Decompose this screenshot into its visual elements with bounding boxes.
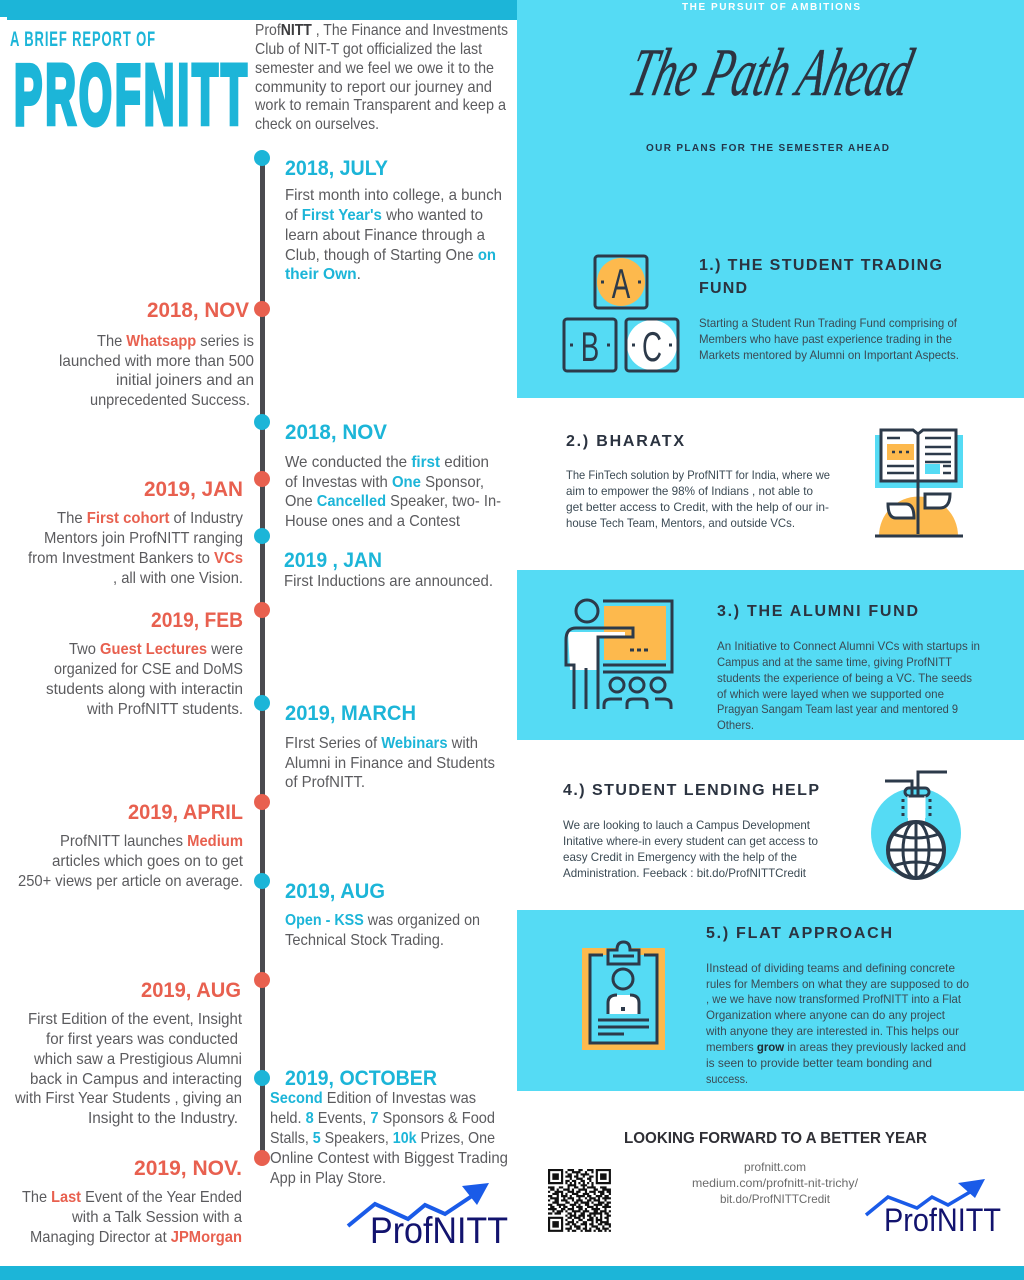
event: 2019 March: FIrst Series of Webinars with (285, 735, 478, 752)
event: 2019 April: 250+ views per article on average. (18, 873, 243, 890)
event: 2019 Aug Insight: back in Campus and interacting (30, 1071, 242, 1088)
event: 2019 Nov: The Last Event of the Year Ended (22, 1189, 242, 1206)
event: 2019 April: 2019, APRIL (128, 801, 243, 824)
intro paragraph: work to remain Transparent and keep a (254, 97, 506, 114)
event: 2019 Aug Insight: First Edition of the event, Insight (28, 1011, 243, 1028)
description (699, 316, 959, 362)
subtitle: OUR PLANS FOR THE SEMESTER AHEAD (646, 143, 889, 154)
event: 2018 Nov Investas: 2018, NOV (285, 421, 387, 444)
event: 2019 Aug Insight: Insight to the Industry. (88, 1110, 238, 1127)
description: house Tech Team, Mentors, and outside VCs. (566, 516, 795, 530)
icon: ABC blocks: B (581, 323, 599, 370)
event: 2019 Aug KSS (285, 880, 480, 949)
event: 2019 March: Alumni in Finance and Students (285, 755, 495, 772)
panel 3: alumni fund (517, 570, 1024, 740)
description: Markets mentored by Alumni on Important Aspects. (699, 348, 959, 362)
description: Administration. Feeback : bit.do/ProfNITTCredit (563, 866, 807, 880)
event: 2019 Jan inductions: First Inductions are announced. (284, 573, 493, 590)
eyebrow: pursuit of ambitions: THE PURSUIT OF AMBITIONS (682, 2, 860, 13)
description: Pragyan Sangam Team last year and mentored 9 (717, 702, 958, 716)
description: IInstead of dividing teams and defining concrete (706, 961, 955, 975)
footer links: profnitt.com (744, 1160, 806, 1174)
event: 2019 October (270, 1067, 508, 1187)
event: 2018 July: of First Year's who wanted to (285, 207, 483, 224)
event: 2019 Jan cohort: from Investment Bankers to VCs (28, 550, 243, 567)
intro paragraph: semester and we feel we owe it to the (255, 60, 494, 77)
description: easy Credit in Emergency with the help of the (563, 850, 797, 864)
description: Organization where anyone can do any project (706, 1008, 946, 1022)
footer heading: LOOKING FORWARD TO A BETTER YEAR (624, 1130, 927, 1147)
event: 2019 Aug KSS: Technical Stock Trading. (285, 932, 444, 949)
event: 2019 October: Online Contest with Biggest Trading (270, 1150, 508, 1167)
event: 2019 Aug Insight: which saw a Prestigious Alumni (33, 1051, 242, 1068)
icon: globe (871, 772, 961, 879)
panel 5: flat approach (517, 910, 1024, 1091)
heading (699, 257, 942, 297)
event: 2019 Jan inductions (284, 549, 493, 590)
event: 2018 Nov Whatsapp: launched with more than 500 (59, 353, 254, 370)
event: 2019 Jan cohort: The First cohort of Industry (57, 510, 243, 527)
heading: 2.) BHARATX (566, 433, 684, 450)
eyebrow: a brief report of: A BRIEF REPORT OF (10, 27, 155, 51)
description (563, 818, 818, 880)
logo: ProfNITT left: ProfNITT (370, 1210, 508, 1251)
logo: ProfNITT right: ProfNITT (884, 1202, 1001, 1238)
description: with anyone they are interested in. This helps our (705, 1024, 959, 1038)
description: , we we have now transformed ProfNITT into a Flat (706, 992, 962, 1006)
icon: clipboard (582, 942, 665, 1050)
panel 2: BharatX (566, 430, 963, 536)
logo: ProfNITT left (348, 1183, 508, 1251)
panel: header the path ahead (517, 0, 1024, 398)
event: 2019 October: Second Edition of Investas was (270, 1090, 476, 1107)
event: 2019 March (285, 702, 495, 791)
intro paragraph: check on ourselves. (255, 116, 379, 133)
event: 2019 Feb (46, 609, 243, 718)
event: 2018 Nov Investas: of Investas with One Sponsor, (285, 474, 484, 491)
heading: 3.) THE ALUMNI FUND (717, 603, 918, 620)
top bar (0, 0, 517, 20)
event: 2018 Nov Investas: We conducted the first edition (285, 454, 489, 471)
event: 2019 October: App in Play Store. (270, 1170, 386, 1187)
heading: 4.) STUDENT LENDING HELP (563, 782, 819, 799)
description (717, 639, 980, 732)
description (705, 961, 969, 1086)
title: PROFNITT: PROFNITT (14, 48, 247, 143)
event: 2019 Aug KSS: Open - KSS was organized on (285, 912, 480, 929)
event: 2019 October: Stalls, 5 Speakers, 10k Prizes, One (270, 1130, 495, 1147)
event: 2018 July (285, 157, 502, 283)
event: 2019 Nov: 2019, NOV. (134, 1157, 242, 1180)
header: report title (10, 27, 247, 143)
event: 2018 Nov Whatsapp (59, 299, 254, 409)
event: 2019 Jan cohort (28, 478, 243, 587)
footer links: medium.com/profnitt-nit-trichy/ (692, 1176, 859, 1190)
event: 2019 Aug Insight: with First Year Students , giving an (14, 1090, 242, 1107)
description: We are looking to lauch a Campus Development (563, 818, 811, 832)
event: 2019 April: ProfNITT launches Medium (60, 833, 243, 850)
intro paragraph (254, 22, 508, 133)
description: Others. (717, 718, 754, 732)
timeline spine with dots (254, 150, 270, 1166)
description: Starting a Student Run Trading Fund comprising of (699, 316, 958, 330)
event: 2019 Feb: Two Guest Lectures were (69, 641, 243, 658)
event: 2019 Nov (22, 1157, 242, 1246)
event: 2019 Feb: organized for CSE and DoMS (54, 661, 243, 678)
event: 2018 July: their Own. (285, 266, 361, 283)
panel 4: student lending help (563, 772, 961, 880)
event: 2019 Aug Insight: 2019, AUG (141, 979, 241, 1002)
icon: ABC blocks: C (642, 323, 662, 370)
event: 2018 Nov Whatsapp: The Whatsapp series is (97, 333, 254, 350)
icon: ABC blocks (564, 256, 678, 371)
event: 2019 Aug KSS: 2019, AUG (285, 880, 385, 903)
QR code (548, 1169, 611, 1232)
event: 2018 Nov Investas: One Cancelled Speaker, two- In- (285, 493, 501, 510)
description: of which were layed when we supported one (717, 687, 944, 701)
event: 2019 Jan cohort: 2019, JAN (144, 478, 243, 501)
description: members grow in areas they previously lacked and (706, 1040, 966, 1054)
event: 2018 July: Club, though of Starting One on (285, 247, 496, 264)
event: 2019 March: of ProfNITT. (285, 774, 365, 791)
intro paragraph: ProfNITT , The Finance and Investments (255, 22, 508, 39)
description: success. (706, 1072, 748, 1086)
event: 2018 Nov Investas (285, 421, 501, 530)
event: 2019 Aug Insight (14, 979, 243, 1127)
event: 2019 April: articles which goes on to get (52, 853, 244, 870)
event: 2018 July: First month into college, a bunch (285, 187, 502, 204)
event: 2019 Nov: with a Talk Session with a (71, 1209, 242, 1226)
event: 2018 Nov Whatsapp: 2018, NOV (147, 299, 249, 322)
event: 2019 Aug Insight: for first years was conducted (46, 1031, 238, 1048)
panel 1: student trading fund (564, 256, 959, 371)
intro paragraph: community to report our journey and (255, 79, 492, 96)
description: students the experience of being a VC. The seeds (717, 671, 972, 685)
intro paragraph: Club of NIT-T got officialized the last (255, 41, 482, 58)
footer links (692, 1160, 859, 1206)
description: Campus and at the same time, giving ProfNITT (717, 655, 953, 669)
event: 2019 October: 2019, OCTOBER (285, 1067, 437, 1090)
description: The FinTech solution by ProfNITT for India, where we (566, 468, 830, 482)
description: get better access to Credit, with the help of our in- (566, 500, 829, 514)
event: 2019 Jan cohort: Mentors join ProfNITT ranging (44, 530, 243, 547)
event: 2019 March: 2019, MARCH (285, 702, 416, 725)
description: is seen to provide better team bonding and (706, 1056, 932, 1070)
bottom bar (0, 1266, 1024, 1280)
description: An Initiative to Connect Alumni VCs with startups in (717, 639, 980, 653)
event: 2019 Jan inductions: 2019 , JAN (284, 549, 382, 572)
description: aim to empower the 98% of Indians , not able to (566, 484, 813, 498)
event: 2018 Nov Whatsapp: unprecedented Success. (90, 392, 250, 409)
event: 2018 Nov Whatsapp: initial joiners and an (116, 372, 254, 389)
logo: ProfNITT right (866, 1179, 1001, 1238)
heading: FUND (699, 280, 747, 297)
icon: presenter at board with audience (566, 600, 672, 709)
footer links: bit.do/ProfNITTCredit (720, 1192, 831, 1206)
description (566, 468, 830, 530)
heading: 5.) FLAT APPROACH (706, 925, 892, 942)
icon: ABC blocks: A (612, 260, 630, 307)
heading: 1.) THE STUDENT TRADING (699, 257, 942, 274)
event: 2019 Feb: students along with interactin (46, 681, 243, 698)
event: 2018 July: 2018, JULY (285, 157, 388, 180)
description: rules for Members on what they are supposed to do (706, 977, 969, 991)
event: 2019 Feb: 2019, FEB (151, 609, 243, 632)
event: 2019 October: held. 8 Events, 7 Sponsors & Food (270, 1110, 495, 1127)
description: Members who have past experience trading in the (699, 332, 952, 346)
event: 2019 Feb: with ProfNITT students. (86, 701, 243, 718)
event: 2019 April (18, 801, 244, 890)
event: 2018 July: learn about Finance through a (285, 227, 485, 244)
event: 2019 Nov: Managing Director at JPMorgan (30, 1229, 242, 1246)
event: 2019 Jan cohort: , all with one Vision. (113, 570, 243, 587)
description: Initative where-in every student can get access to (563, 834, 818, 848)
event: 2018 Nov Investas: House ones and a Contest (285, 513, 461, 530)
icon: open book and plant (875, 430, 963, 536)
